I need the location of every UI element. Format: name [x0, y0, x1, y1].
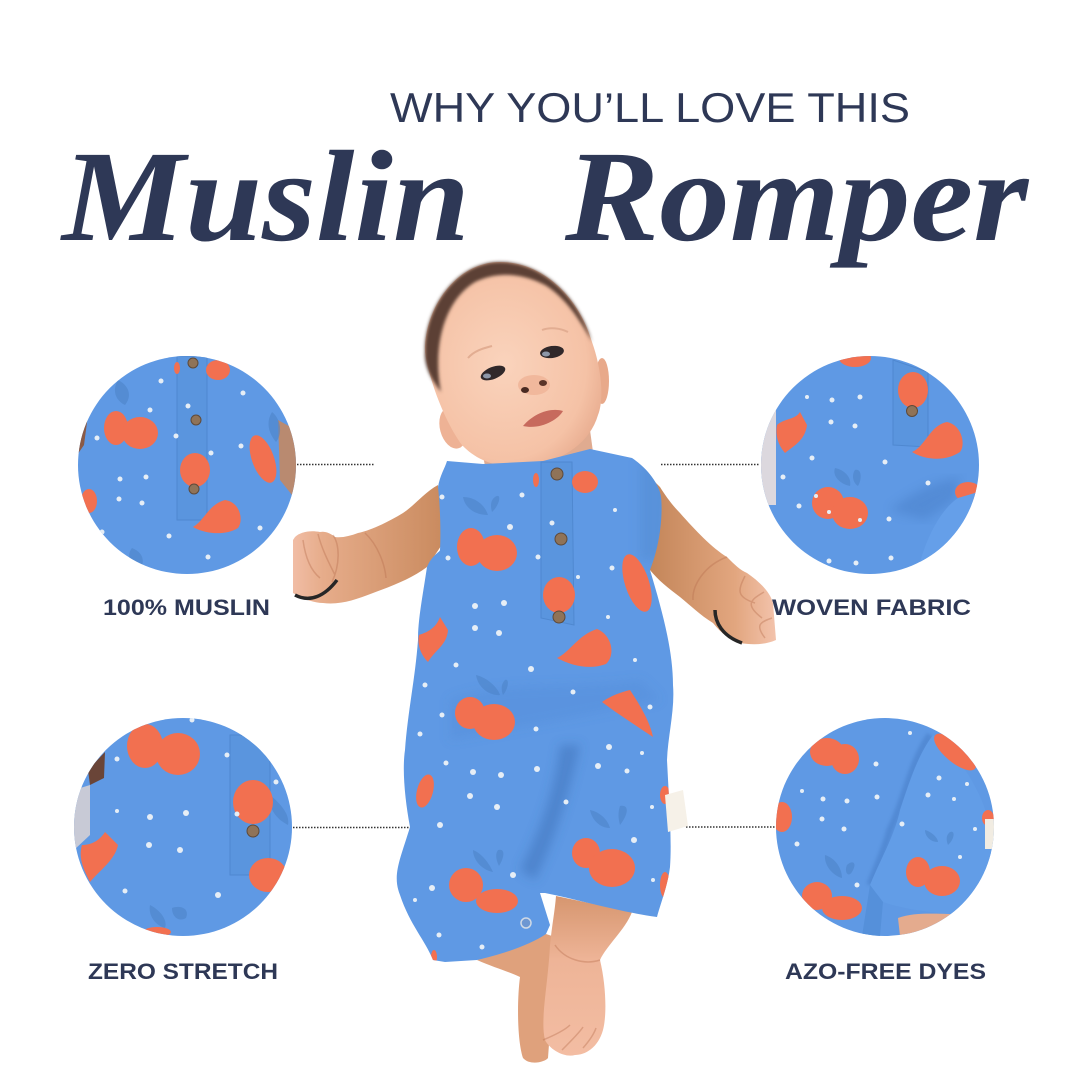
- placket: [541, 462, 574, 625]
- icon: fabric swatch two: [761, 349, 985, 574]
- title: Muslin Romper: Muslin: [60, 125, 470, 269]
- hair: [425, 262, 592, 392]
- ear left: [435, 404, 471, 452]
- connector line: [686, 826, 776, 828]
- leaves: [463, 496, 627, 872]
- label: AZO-FREE DYES: [785, 959, 986, 984]
- panel: zero stretch detail: [74, 718, 411, 984]
- polka dots: [413, 492, 655, 950]
- shading folds: [521, 464, 662, 878]
- snap: [521, 918, 531, 928]
- cherries: [413, 471, 670, 964]
- panel: 100% muslin detail: [77, 356, 375, 620]
- left arm: [293, 485, 445, 603]
- label: WOVEN FABRIC: [772, 595, 971, 620]
- connector line: [293, 826, 411, 828]
- wristband left: [295, 580, 337, 598]
- neck: [480, 430, 593, 466]
- label: 100% MUSLIN: [103, 595, 270, 620]
- panel: azo-free dyes detail: [686, 718, 997, 984]
- mouth: [523, 410, 563, 427]
- title: Muslin Romper: Romper: [564, 125, 1029, 269]
- right arm: [640, 482, 776, 644]
- title: Muslin Romper: [60, 125, 1029, 269]
- connector line: [661, 464, 760, 466]
- panel: woven fabric detail: [661, 349, 985, 620]
- baby illustration: [293, 262, 776, 1063]
- face: [425, 262, 601, 467]
- left leg and foot: [477, 934, 555, 1063]
- eyes: [468, 328, 568, 383]
- icon: fabric swatch one: [77, 356, 296, 574]
- connector line: [297, 464, 375, 466]
- wristband right: [715, 610, 742, 643]
- right leg and foot: [543, 896, 632, 1056]
- ear right: [595, 358, 609, 404]
- buttons: [551, 468, 567, 623]
- icon: fabric swatch four: [772, 718, 997, 936]
- icon: fabric swatch three: [74, 718, 292, 937]
- subtitle: WHY YOU’LL LOVE THIS: [390, 84, 910, 131]
- garment tag: [665, 790, 688, 832]
- label: ZERO STRETCH: [88, 959, 278, 984]
- nose: [518, 375, 550, 395]
- romper: [390, 445, 685, 970]
